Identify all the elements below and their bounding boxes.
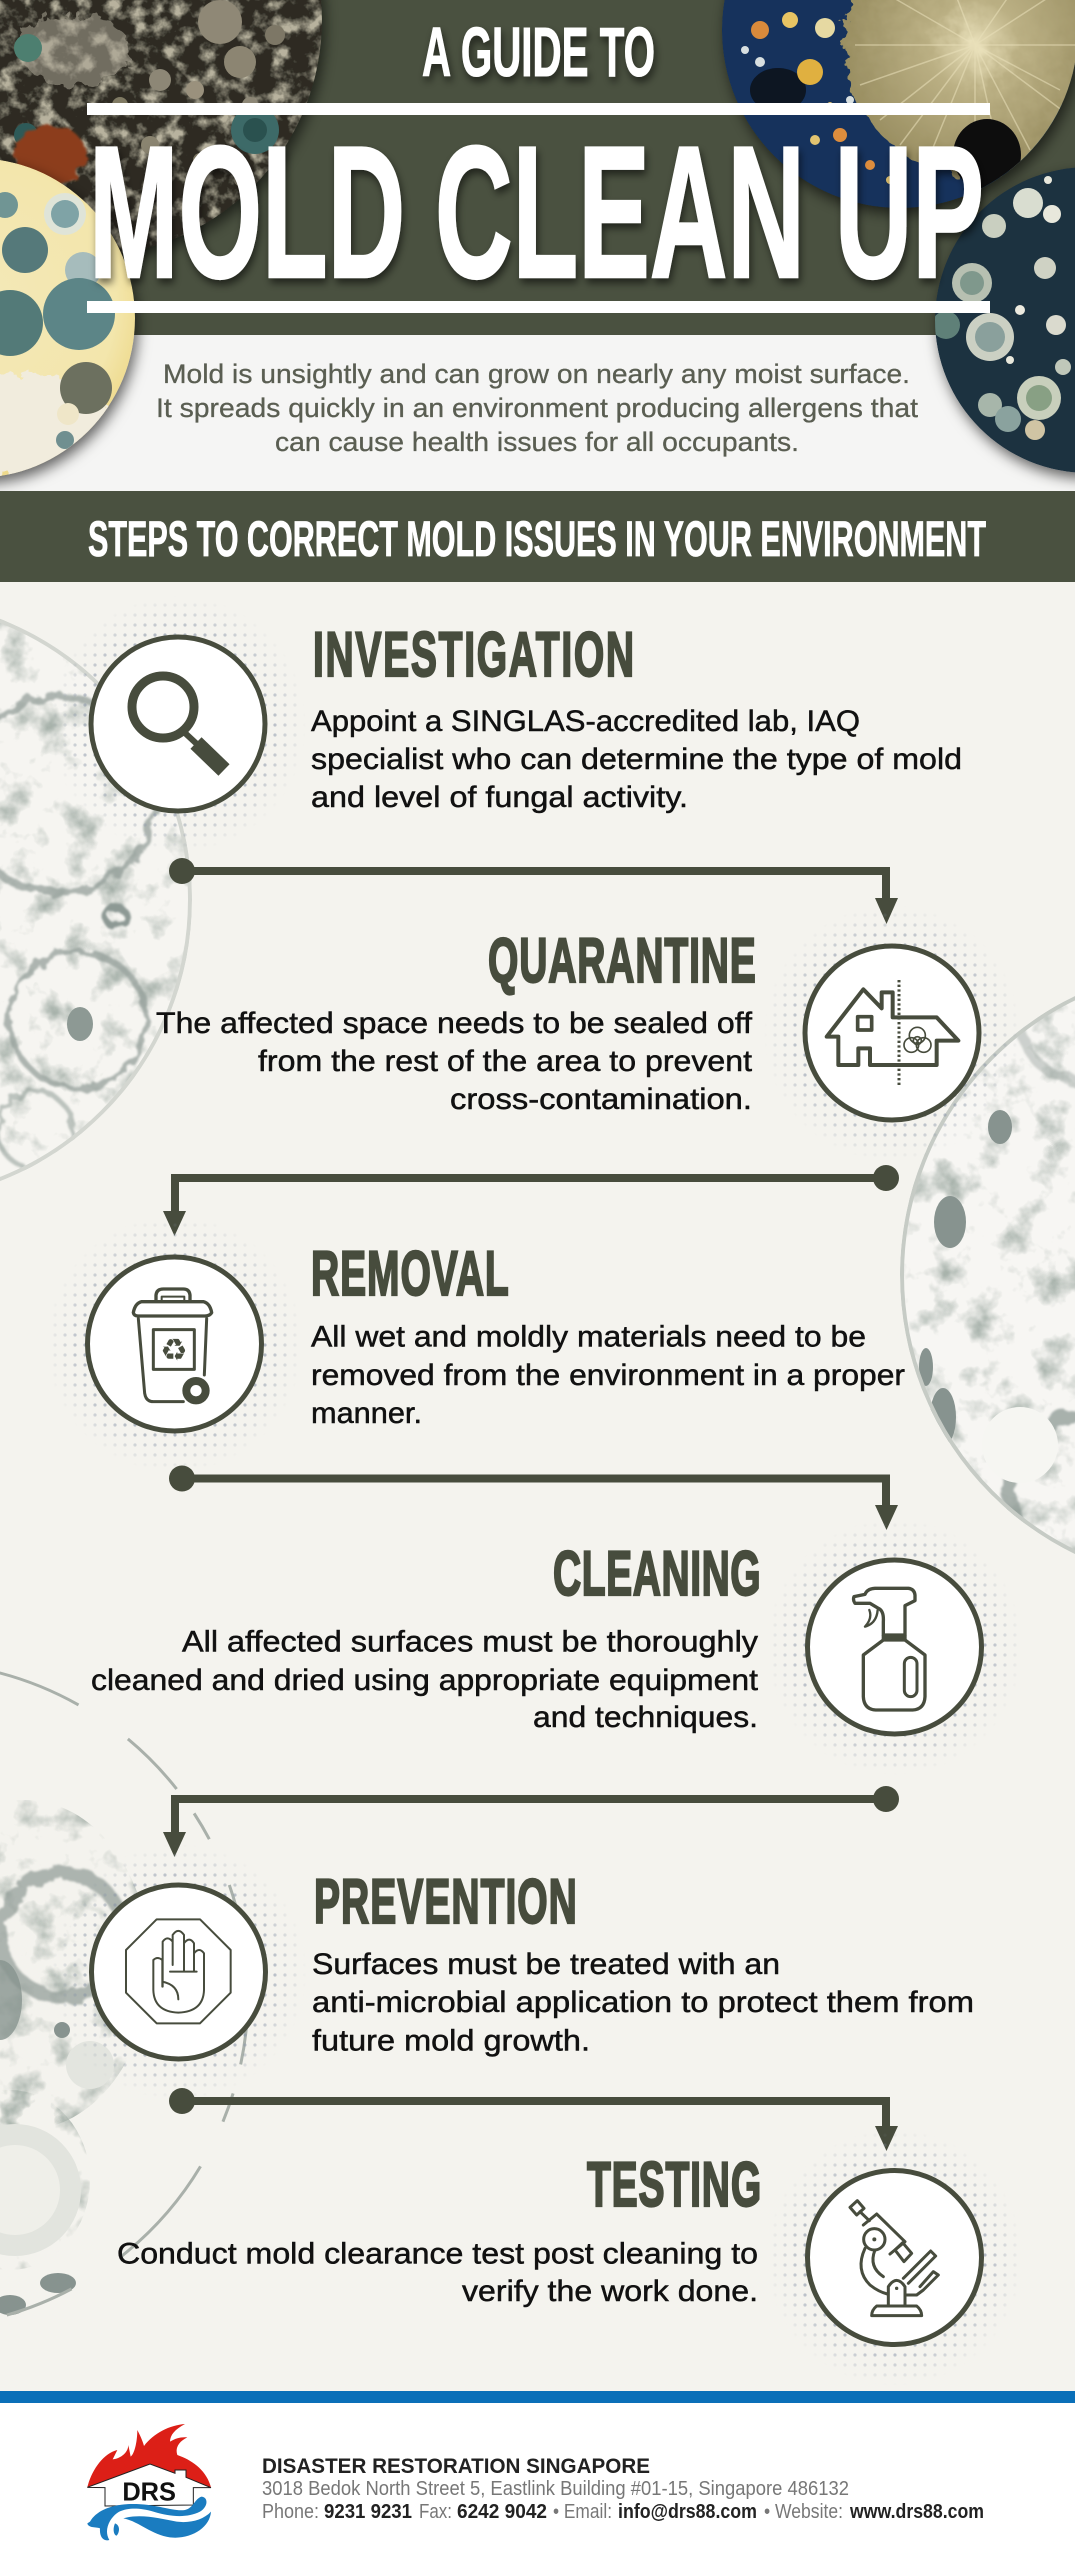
photo: teal mold dish [932,167,1075,473]
icon: magnifying glass [91,637,265,811]
contact details: Fax: [419,2500,452,2523]
photo: yellow mold dish [0,158,135,478]
text: investigation [311,705,962,814]
panel: header [0,0,1075,491]
logo: DRS [87,2424,211,2540]
intro text [156,359,919,457]
title: a guide to: A GUIDE TO [422,13,655,91]
step: cleaning [91,1519,1022,1775]
text: quarantine [156,1007,753,1116]
contact details: info@drs88.com [618,2500,757,2523]
title rule top [87,103,990,115]
photo: blue mold dish [722,0,1075,215]
halftone: investigation [56,604,296,846]
text: cleaning: All affected surfaces must be thoroughly [182,1626,758,1658]
text: testing: verify the work done. [462,2275,758,2308]
text: investigation: and level of fungal activity. [311,781,688,814]
intro background [0,335,1075,491]
address: 3018 Bedok North Street 5, Eastlink Building #01-15, Singapore 486132 [262,2477,849,2500]
text: removal: removed from the environment in a proper [311,1359,905,1392]
text: testing: Conduct mold clearance test post cleaning to [117,2238,758,2270]
halftone: prevention [55,1854,296,2095]
icon: recycling bin: ♻ [160,1334,188,1369]
halftone: removal [46,1216,302,1472]
contact details: www.drs88.com [849,2500,984,2523]
photo: dark mold dish [0,0,322,256]
icon: microscope [808,2170,982,2344]
title rule bottom [87,301,990,313]
heading: testing: TESTING [587,2151,761,2220]
contact details: 9231 9231 [324,2500,412,2523]
intro text: Mold is unsightly and can grow on nearly any moist surface. [163,359,910,389]
text: investigation: Appoint a SINGLAS-accredited lab, IAQ [311,705,860,738]
text: quarantine: cross-contamination. [450,1083,752,1116]
arrow: cleaning to prevention [163,1786,899,1857]
text: testing [117,2238,758,2308]
contact details: • Email: [553,2500,612,2523]
icon: house with biohazard [805,946,979,1120]
text: prevention: anti-microbial application to protect them from [312,1986,974,2019]
heading: investigation: INVESTIGATION [313,621,634,690]
text: cleaning: and techniques. [533,1701,758,1734]
band: steps heading [0,491,1075,582]
halftone: testing [774,2134,1016,2376]
background: ghost petri dish left bottom [0,1662,248,2328]
step: testing [117,2130,1022,2386]
text: cleaning [91,1626,759,1734]
contact details [262,2500,984,2523]
text: removal [311,1320,905,1430]
halftone: quarantine [774,914,1016,1156]
arrow: prevention to testing [169,2088,898,2151]
text: prevention: Surfaces must be treated with an [312,1948,780,1981]
icon: spray bottle [808,1560,982,1734]
arrow: quarantine to removal [163,1165,899,1236]
blue footer bar [0,2391,1075,2403]
heading: prevention: PREVENTION [314,1868,577,1937]
text: removal: All wet and moldly materials need to be [311,1320,866,1354]
contact details: Phone: [262,2500,319,2523]
heading: quarantine: QUARANTINE [488,927,756,996]
logo: DRS: DRS [122,2477,176,2507]
icon: stop hand [92,1885,266,2059]
company name: DISASTER RESTORATION SINGAPORE [262,2455,650,2478]
arrow: investigation to quarantine [169,858,898,924]
text: quarantine: The affected space needs to be sealed off [156,1007,753,1040]
halftone: cleaning [766,1519,1022,1775]
text: prevention: future mold growth. [312,2024,590,2058]
step: removal [46,1216,905,1472]
arrow: removal to cleaning [169,1466,898,1530]
step: investigation [50,596,962,852]
text: quarantine: from the rest of the area to prevent [258,1045,753,1078]
intro text: It spreads quickly in an environment producing allergens that [156,393,919,423]
text: removal: manner. [311,1397,422,1430]
intro text: can cause health issues for all occupants. [275,427,799,457]
heading: removal: REMOVAL [311,1240,509,1309]
contact details: • Website: [764,2500,843,2523]
heading: cleaning: CLEANING [553,1540,761,1609]
contact details: 6242 9042 [457,2500,547,2523]
step: quarantine [156,905,1020,1161]
footer [0,2391,1075,2560]
text: cleaning: cleaned and dried using appropriate equipment [91,1664,759,1697]
step: prevention [50,1844,974,2100]
background: ghost petri dish left top [0,619,192,1181]
background: ghost petri dish right [900,996,1075,1554]
icon: recycling bin [88,1257,262,1431]
text: prevention [312,1948,974,2058]
text: investigation: specialist who can determine the type of mold [311,743,962,776]
